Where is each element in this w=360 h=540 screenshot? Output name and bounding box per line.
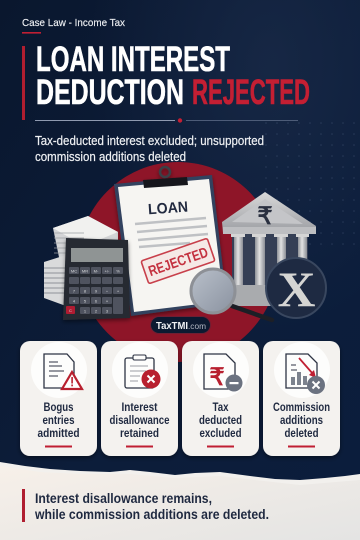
clip [143, 167, 188, 188]
red semicircle backdrop [78, 162, 278, 362]
card: tax deducted excluded: Tax [212, 400, 229, 414]
title: LOAN INTEREST [36, 40, 230, 79]
card: commission additions deleted: Commission [273, 400, 330, 414]
footer takeaway [22, 489, 269, 522]
calculator: 9 [95, 288, 98, 294]
icon: clipboard with cross [125, 355, 160, 388]
calculator [63, 238, 130, 320]
clipboard with loan document [114, 167, 227, 316]
calculator: 6 [95, 298, 98, 304]
card: commission additions deleted [263, 341, 340, 456]
x badge [266, 258, 326, 318]
eyebrow: case law category: Case Law - Income Tax [22, 17, 126, 29]
subtitle [35, 133, 264, 164]
card: interest disallowance retained: retained [120, 426, 159, 440]
calculator: 8 [84, 288, 87, 294]
icon: document with warning [44, 354, 82, 389]
title [22, 40, 310, 120]
calculator: M- [94, 268, 99, 274]
brand pill [150, 316, 210, 334]
calculator: 1 [84, 308, 87, 314]
card: commission additions deleted: deleted [284, 426, 318, 440]
card: commission additions deleted: additions [280, 413, 323, 427]
brand pill: .com [188, 321, 206, 331]
card: tax deducted excluded: excluded [200, 426, 242, 440]
calculator: ÷ [106, 288, 109, 294]
card: bogus entries admitted [20, 341, 97, 456]
calculator: % [116, 268, 120, 274]
card: bogus entries admitted: Bogus [44, 400, 74, 414]
footer takeaway: while commission additions are deleted. [34, 507, 269, 522]
calculator: 7 [73, 288, 76, 294]
calculator: +/- [105, 268, 110, 274]
calculator: C [69, 308, 72, 313]
icon: falling chart document with cross [286, 354, 325, 394]
card: interest disallowance retained: disallowance [110, 413, 170, 427]
subtitle: Tax-deducted interest excluded; unsupported [35, 133, 264, 148]
footer takeaway: Interest disallowance remains, [35, 491, 212, 506]
eyebrow: case law category [22, 17, 126, 34]
calculator: × [106, 298, 109, 304]
magnifying glass [191, 269, 272, 320]
document heading: LOAN [147, 199, 189, 218]
calculator: + [117, 288, 120, 294]
paper stacks [44, 216, 118, 306]
rejected stamp: REJECTED [147, 245, 210, 280]
x badge: X [278, 261, 316, 317]
card: bogus entries admitted: entries [42, 413, 75, 427]
card: tax deducted excluded: deducted [199, 413, 242, 427]
subtitle: commission additions deleted [35, 149, 186, 164]
calculator: 3 [106, 308, 109, 314]
calculator: 5 [84, 298, 87, 304]
calculator: 4 [73, 298, 76, 304]
icon: rupee document with minus: ₹ [209, 364, 225, 391]
torn paper footer [0, 462, 360, 540]
card: interest disallowance retained [101, 341, 178, 456]
divider [35, 118, 298, 123]
brand pill: TaxTMI [156, 320, 188, 332]
card: bogus entries admitted: admitted [38, 426, 80, 440]
calculator: MC [71, 268, 77, 274]
card: interest disallowance retained: Interest [122, 400, 158, 414]
bank building [222, 192, 316, 306]
card: tax deducted excluded [182, 341, 259, 456]
rupee symbol: ₹ [257, 203, 273, 230]
calculator: MR [82, 268, 88, 274]
title: DEDUCTION [36, 73, 184, 112]
calculator: 2 [95, 308, 98, 314]
